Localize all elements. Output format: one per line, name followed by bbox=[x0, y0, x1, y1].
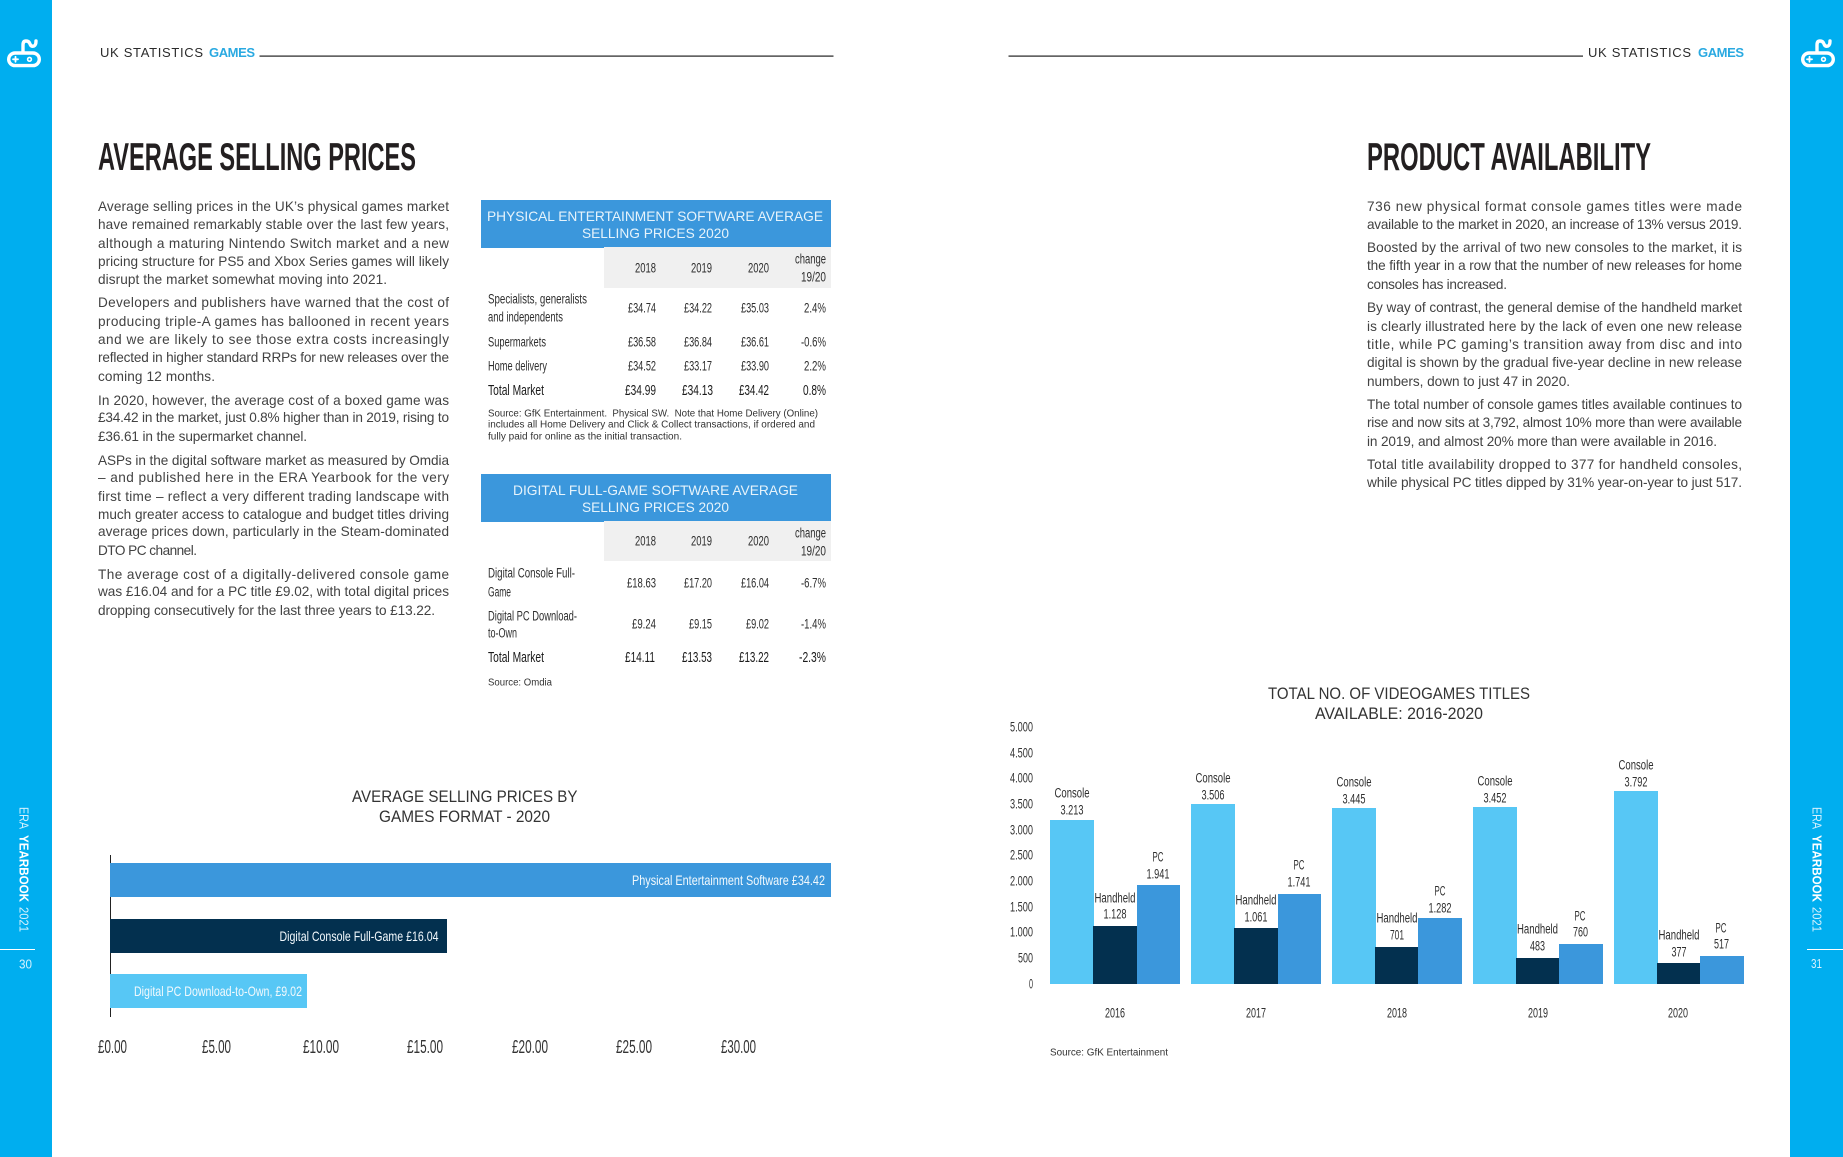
vertical label: ERA Yearbook 2021: 2021 bbox=[16, 907, 30, 932]
body text left column: Average selling prices in the UK’s physical games market bbox=[98, 199, 449, 214]
vertical label: ERA Yearbook 2021: YEARBOOK bbox=[16, 835, 30, 902]
bars 2017: Console bbox=[1196, 770, 1230, 786]
bar: digital pc download-to-own bbox=[110, 974, 307, 1008]
data rows: £13.53 bbox=[682, 650, 712, 666]
bars 2019: 2019 bbox=[1528, 1006, 1548, 1020]
body text right column: while physical PC titles dipped by 31% year-on-year to just 517. bbox=[1366, 475, 1742, 490]
bars 2018: PC bbox=[1434, 884, 1446, 898]
x axis labels: £5.00 bbox=[202, 1037, 231, 1057]
bars 2020: Handheld bbox=[1658, 928, 1700, 942]
bar: digital console full-game: Digital Console Full-Game £16.04 bbox=[280, 928, 439, 944]
vertical label: ERA Yearbook 2021 bbox=[16, 807, 30, 932]
table: physical entertainment software prices bbox=[481, 200, 831, 442]
y axis labels: 4.000 bbox=[1010, 770, 1033, 786]
bars 2018: 2018 bbox=[1387, 1006, 1407, 1020]
column headings: 2019 bbox=[691, 534, 712, 548]
body text left column: much greater access to catalogue and budget titles driving bbox=[98, 507, 449, 522]
body text right column: title, while PC gaming’s transition away from disc and into bbox=[1367, 337, 1742, 352]
source note: includes all Home Delivery and Click & Collect transactions, if ordered and bbox=[488, 420, 815, 430]
x axis labels: £25.00 bbox=[616, 1037, 652, 1057]
body text right column: available to the market in 2020, an increase of 13% versus 2019. bbox=[1367, 217, 1742, 232]
body text left column: ASPs in the digital software market as measured by Omdia bbox=[98, 453, 449, 468]
vertical label: ERA Yearbook 2021 right: YEARBOOK bbox=[1810, 835, 1824, 902]
body text left column: and we are likely to see those extra costs increasingly bbox=[98, 332, 449, 347]
body text left column bbox=[97, 199, 449, 618]
data rows: Digital PC Download- bbox=[488, 608, 577, 624]
body text right column: digital is shown by the gradual five-year decline in new release bbox=[1367, 355, 1742, 370]
table header band bbox=[481, 474, 831, 522]
body text left column: £36.61 in the supermarket channel. bbox=[98, 429, 307, 444]
left page sidebar bbox=[0, 0, 52, 1157]
body text left column: disrupt the market somewhat moving into 2021. bbox=[98, 272, 387, 287]
bar: digital pc download-to-own: Digital PC Download-to-Own, £9.02 bbox=[134, 983, 302, 999]
data rows: -1.4% bbox=[801, 616, 826, 632]
data rows: £13.22 bbox=[739, 650, 769, 666]
running header left bbox=[100, 45, 834, 60]
body text left column: £34.42 in the market, just 0.8% higher than in 2019, rising to bbox=[98, 410, 449, 425]
table header band bbox=[481, 200, 831, 248]
chart title: AVERAGE SELLING PRICES BY bbox=[352, 787, 578, 806]
bars 2019: Handheld bbox=[1517, 922, 1558, 936]
data rows: £36.58 bbox=[628, 334, 656, 350]
source note: Source: GfK Entertainment bbox=[1050, 1048, 1168, 1058]
body text left column: In 2020, however, the average cost of a boxed game was bbox=[98, 393, 449, 408]
data rows: -2.3% bbox=[799, 650, 826, 666]
body text left column: producing triple-A games has ballooned in recent years bbox=[98, 314, 449, 329]
heading: product availability: PRODUCT AVAILABILITY bbox=[1367, 136, 1651, 179]
bars 2020: Console bbox=[1618, 758, 1654, 772]
data rows: Supermarkets bbox=[488, 334, 546, 350]
body text right column: By way of contrast, the general demise of the handheld market bbox=[1367, 300, 1742, 315]
icon: game controller right bbox=[1803, 41, 1833, 66]
running header left: UK STATISTICS bbox=[100, 45, 203, 60]
body text left column: pricing structure for PS5 and Xbox Series games will likely bbox=[98, 254, 449, 269]
chart title: GAMES FORMAT - 2020 bbox=[379, 807, 550, 826]
body text right column: Total title availability dropped to 377 for handheld consoles, bbox=[1367, 457, 1742, 472]
bars 2016: 3.213 bbox=[1060, 802, 1084, 818]
bars 2020 bbox=[1614, 758, 1744, 1020]
icon: game controller left bbox=[9, 41, 39, 66]
bars 2016: 1.128 bbox=[1104, 906, 1126, 922]
table header band: SELLING PRICES 2020 bbox=[582, 225, 729, 241]
data rows: £35.03 bbox=[741, 300, 769, 316]
running header left: GAMES bbox=[209, 45, 255, 60]
chart title: TOTAL NO. OF VIDEOGAMES TITLES bbox=[1268, 684, 1530, 703]
data rows: £36.84 bbox=[684, 334, 712, 350]
bars 2019: 760 bbox=[1573, 924, 1588, 940]
heading: average selling prices: AVERAGE SELLING PRICES bbox=[98, 136, 416, 179]
body text left column: – and published here in the ERA Yearbook for the very bbox=[98, 470, 449, 485]
bars 2017: 1.741 bbox=[1288, 874, 1310, 890]
bars 2019: 483 bbox=[1530, 938, 1545, 954]
vertical label: ERA Yearbook 2021: ERA bbox=[16, 807, 30, 830]
bars 2020: 2020 bbox=[1668, 1006, 1688, 1020]
bars 2019 bbox=[1473, 774, 1603, 1020]
column headings: 2018 bbox=[635, 534, 656, 548]
y axis labels: 5.000 bbox=[1010, 720, 1033, 734]
data rows: -6.7% bbox=[801, 576, 826, 590]
body text right column: is clearly illustrated here by the lack of even one new release bbox=[1367, 319, 1742, 334]
bars 2017: PC bbox=[1294, 858, 1305, 872]
vertical label: ERA Yearbook 2021 right bbox=[1810, 807, 1824, 932]
chart title bbox=[352, 787, 578, 826]
column headings: 2020 bbox=[748, 260, 769, 276]
body text left column: reflected in higher standard RRPs for new releases over the bbox=[98, 350, 449, 365]
y axis labels: 1.500 bbox=[1010, 900, 1033, 914]
table: digital full-game software prices bbox=[481, 474, 831, 688]
bars 2016 bbox=[1050, 786, 1180, 1020]
body text right column: in 2019, and almost 20% more than were available in 2016. bbox=[1367, 434, 1717, 449]
data rows: £34.22 bbox=[684, 300, 712, 316]
column headings: change bbox=[795, 526, 826, 540]
y axis labels: 0 bbox=[1029, 976, 1033, 992]
bars 2020: 3.792 bbox=[1624, 774, 1648, 790]
column headings: 19/20 bbox=[801, 270, 826, 284]
data rows: £36.61 bbox=[741, 334, 769, 350]
data rows: 2.2% bbox=[804, 358, 826, 374]
data rows: £33.17 bbox=[684, 358, 712, 374]
data rows: £14.11 bbox=[625, 650, 655, 666]
bar: physical entertainment software bbox=[110, 863, 831, 897]
bars 2018: Handheld bbox=[1376, 910, 1418, 926]
x axis labels: £15.00 bbox=[407, 1037, 443, 1057]
bars 2020: 517 bbox=[1714, 936, 1729, 952]
data rows bbox=[488, 292, 826, 399]
source note: Source: Omdia bbox=[488, 678, 552, 688]
data rows: 2.4% bbox=[804, 300, 826, 316]
y axis labels: 4.500 bbox=[1010, 746, 1033, 760]
data rows: Digital Console Full- bbox=[488, 566, 575, 580]
bar chart: average selling prices by format bbox=[98, 787, 831, 1057]
bar chart: total videogames titles available bbox=[1010, 684, 1744, 1058]
body text left column: The average cost of a digitally-delivered console game bbox=[98, 567, 449, 582]
bars 2016: Console bbox=[1054, 786, 1090, 800]
data rows: £34.13 bbox=[682, 383, 713, 399]
chart title bbox=[1268, 684, 1530, 723]
column headings: change bbox=[795, 252, 826, 266]
bars 2016: Handheld bbox=[1094, 890, 1136, 906]
body text right column: consoles has increased. bbox=[1367, 277, 1507, 292]
bars 2017 bbox=[1191, 770, 1321, 1020]
data rows: £33.90 bbox=[741, 358, 769, 374]
body text left column: DTO PC channel. bbox=[98, 543, 197, 558]
data rows: Total Market bbox=[488, 383, 544, 399]
body text right column: The total number of console games titles available continues to bbox=[1367, 397, 1742, 412]
bars 2018: 701 bbox=[1390, 928, 1404, 942]
bars 2018 bbox=[1332, 774, 1462, 1020]
body text left column: average prices down, particularly in the Steam-dominated bbox=[98, 524, 449, 539]
source note: fully paid for online as the initial transaction. bbox=[488, 432, 682, 442]
vertical label: ERA Yearbook 2021 right: 2021 bbox=[1810, 907, 1824, 932]
source note: Source: GfK Entertainment. Physical SW. Note that Home Delivery (Online) bbox=[488, 408, 818, 420]
body text right column: numbers, down to just 47 in 2020. bbox=[1367, 374, 1570, 389]
x axis labels: £0.00 bbox=[98, 1037, 127, 1057]
data rows: £9.02 bbox=[746, 616, 769, 632]
data rows bbox=[488, 566, 826, 666]
data rows: £16.04 bbox=[741, 576, 769, 590]
body text right column: the fifth year in a row that the number of new releases for home bbox=[1367, 258, 1742, 273]
body text right column: rise and now sits at 3,792, almost 10% more than were available bbox=[1367, 415, 1742, 430]
data rows: £34.74 bbox=[628, 300, 656, 316]
y axis labels bbox=[1010, 720, 1033, 992]
x axis labels: £30.00 bbox=[721, 1037, 756, 1057]
bars 2016: PC bbox=[1152, 850, 1164, 864]
source note bbox=[488, 408, 818, 442]
body text left column: have remained remarkably stable over the last few years, bbox=[98, 217, 449, 232]
data rows: £34.42 bbox=[739, 383, 769, 399]
column headings: 2020 bbox=[748, 534, 769, 548]
chart title: AVAILABLE: 2016-2020 bbox=[1315, 704, 1483, 723]
bars 2017: 1.061 bbox=[1244, 910, 1268, 924]
data rows: Game bbox=[488, 584, 511, 600]
running header right: UK STATISTICS bbox=[1588, 45, 1691, 60]
column headings: 2018 bbox=[635, 260, 656, 276]
body text left column: although a maturing Nintendo Switch market and a new bbox=[98, 236, 449, 251]
data rows: Home delivery bbox=[488, 358, 547, 374]
body text right column: Boosted by the arrival of two new consoles to the market, it is bbox=[1367, 240, 1742, 255]
vertical label: ERA Yearbook 2021 right: ERA bbox=[1810, 807, 1824, 830]
body text left column: Developers and publishers have warned that the cost of bbox=[98, 295, 449, 310]
column headings bbox=[604, 521, 831, 561]
x axis labels: £20.00 bbox=[512, 1037, 548, 1057]
y axis labels: 3.000 bbox=[1010, 822, 1033, 838]
body text left column: dropping consecutively for the last three years to £13.22. bbox=[98, 603, 435, 618]
body text right column: 736 new physical format console games titles were made bbox=[1367, 199, 1742, 214]
bars 2017: 3.506 bbox=[1202, 788, 1224, 802]
bars 2018: Console bbox=[1336, 774, 1372, 790]
bars 2018: 3.445 bbox=[1342, 792, 1366, 806]
bar: digital console full-game bbox=[110, 919, 447, 953]
data rows: £34.52 bbox=[628, 358, 656, 374]
bars 2016: 2016 bbox=[1105, 1006, 1125, 1020]
bars 2020: 377 bbox=[1672, 944, 1686, 960]
body text right column bbox=[1366, 199, 1742, 490]
bars 2020: PC bbox=[1716, 920, 1727, 936]
data rows: £34.99 bbox=[625, 383, 656, 399]
table header band: SELLING PRICES 2020 bbox=[582, 499, 729, 515]
column headings bbox=[604, 247, 831, 288]
data rows: £18.63 bbox=[627, 576, 656, 590]
y axis labels: 500 bbox=[1018, 950, 1033, 966]
data rows: to-Own bbox=[488, 626, 517, 640]
bar: physical entertainment software: Physical Entertainment Software £34.42 bbox=[632, 872, 825, 888]
y axis labels: 2.500 bbox=[1010, 848, 1033, 862]
column headings: 2019 bbox=[691, 260, 712, 276]
running header right bbox=[1008, 45, 1744, 60]
column headings: 19/20 bbox=[801, 544, 826, 558]
running header right: GAMES bbox=[1698, 45, 1744, 60]
bars 2017: Handheld bbox=[1236, 892, 1276, 908]
x axis labels: £10.00 bbox=[303, 1037, 339, 1057]
data rows: £9.24 bbox=[632, 616, 656, 632]
right page sidebar bbox=[1790, 0, 1843, 1157]
data rows: 0.8% bbox=[803, 383, 826, 399]
data rows: Total Market bbox=[488, 650, 544, 666]
bars 2018: 1.282 bbox=[1428, 900, 1452, 916]
bars 2019: Console bbox=[1478, 774, 1512, 788]
body text left column: was £16.04 and for a PC title £9.02, with total digital prices bbox=[97, 584, 449, 599]
data rows: £17.20 bbox=[684, 576, 712, 590]
bars 2016: 1.941 bbox=[1146, 866, 1170, 882]
data rows: and independents bbox=[488, 310, 563, 324]
x axis labels bbox=[98, 1037, 756, 1057]
y axis labels: 1.000 bbox=[1010, 924, 1033, 940]
y axis labels: 2.000 bbox=[1010, 874, 1033, 888]
bars 2019: PC bbox=[1574, 908, 1586, 924]
data rows: £9.15 bbox=[689, 616, 712, 632]
page number 30: 30 bbox=[19, 956, 32, 972]
bars 2017: 2017 bbox=[1246, 1006, 1266, 1020]
data rows: Specialists, generalists bbox=[488, 292, 587, 306]
y axis labels: 3.500 bbox=[1010, 796, 1033, 812]
page number 31: 31 bbox=[1811, 956, 1822, 971]
body text left column: coming 12 months. bbox=[98, 369, 215, 384]
body text left column: first time – reflect a very different trading landscape with bbox=[98, 489, 449, 504]
table header band: PHYSICAL ENTERTAINMENT SOFTWARE AVERAGE bbox=[487, 208, 823, 224]
data rows: -0.6% bbox=[801, 334, 826, 350]
bars 2019: 3.452 bbox=[1484, 790, 1506, 806]
table header band: DIGITAL FULL-GAME SOFTWARE AVERAGE bbox=[513, 482, 798, 498]
